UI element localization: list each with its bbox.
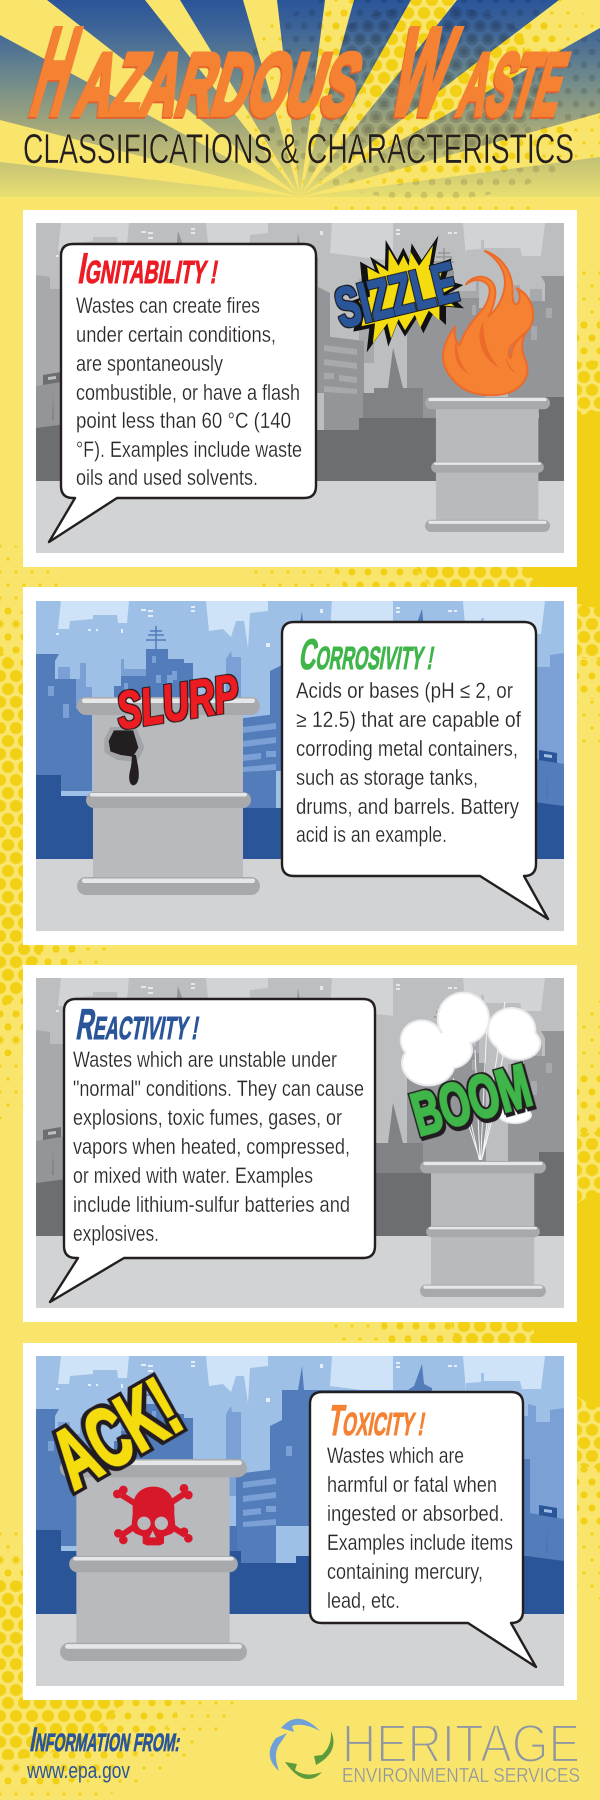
panel: corrosivity [23,587,577,945]
body text: under certain conditions, [76,322,276,347]
body text: oils and used solvents. [76,465,258,490]
sound effect: sizzle: SIZZLE [329,250,463,340]
speech bubble [50,999,375,1302]
body text [76,293,302,490]
body text: corroding metal containers, [296,736,518,761]
sound effect: boom: BOOM [404,1052,538,1149]
body text: point less than 60 °C (140 [76,408,291,433]
city scene: grey [36,223,564,553]
icon: smoke explosion [400,992,541,1160]
body text [296,678,522,847]
body text: Acids or bases (pH ≤ 2, or [296,678,513,703]
body text: Examples include items [327,1530,513,1555]
heading: REACTIVITY ! [73,1001,204,1049]
body text: ≥ 12.5) that are capable of [296,707,522,732]
icon: skull and crossbones [113,1484,193,1545]
body text: or mixed with water. Examples [73,1163,313,1188]
logo: heritage recycling arrows [270,1719,333,1779]
panel: toxicity [23,1343,577,1700]
heading: IGNITABILITY ! [75,245,223,293]
title: H [19,3,93,142]
barrel [425,397,550,532]
body text: Wastes which are [327,1443,464,1468]
sound effect: ack: ACK! [36,1360,196,1507]
footer: source credit [26,1721,184,1783]
panel: ignitability [23,210,577,567]
body text: lead, etc. [327,1588,400,1613]
body text: drums, and barrels. Battery [296,794,519,819]
city scene: blue [36,1356,564,1686]
barrel [77,697,260,895]
city scene: blue [36,601,564,931]
body text: containing mercury, [327,1559,483,1584]
barrel [420,1161,546,1297]
title: AZARDOUS [66,36,372,134]
sound effect: sizzle [329,236,464,352]
heading: CORROSIVITY ! [296,631,439,679]
body text: include lithium-sulfur batteries and [73,1192,350,1217]
icon: corrosive leak [107,729,142,785]
icon: flame [443,251,533,395]
body text: "normal" conditions. They can cause [73,1076,364,1101]
footer: source credit: www.epa.gov [26,1758,130,1783]
body text: explosions, toxic fumes, gases, or [73,1105,342,1130]
speech bubble [282,622,548,919]
body text: harmful or fatal when [327,1472,497,1497]
title [19,3,587,142]
title: W [378,3,470,142]
body text: Wastes which are unstable under [73,1047,337,1072]
speech bubble [49,244,316,542]
body text: acid is an example. [296,822,447,847]
body text: vapors when heated, compressed, [73,1134,350,1159]
header sunburst [0,0,600,220]
footer: source credit: INFORMATION FROM: [28,1721,184,1759]
speech bubble [310,1392,536,1667]
body text: Wastes can create fires [76,293,260,318]
sound effect: slurp: SLURP [113,664,243,741]
heading: TOXICITY ! [325,1397,430,1445]
body text: such as storage tanks, [296,765,478,790]
body text: ingested or absorbed. [327,1501,504,1526]
barrel [60,1459,247,1661]
body text: explosives. [73,1221,159,1246]
body text: °F). Examples include waste [76,437,302,462]
city scene: grey [36,978,564,1308]
body text: combustible, or have a flash [76,380,300,405]
panel: reactivity [23,965,577,1322]
body text: are spontaneously [76,351,223,376]
body text [73,1047,364,1246]
body text [327,1443,513,1613]
